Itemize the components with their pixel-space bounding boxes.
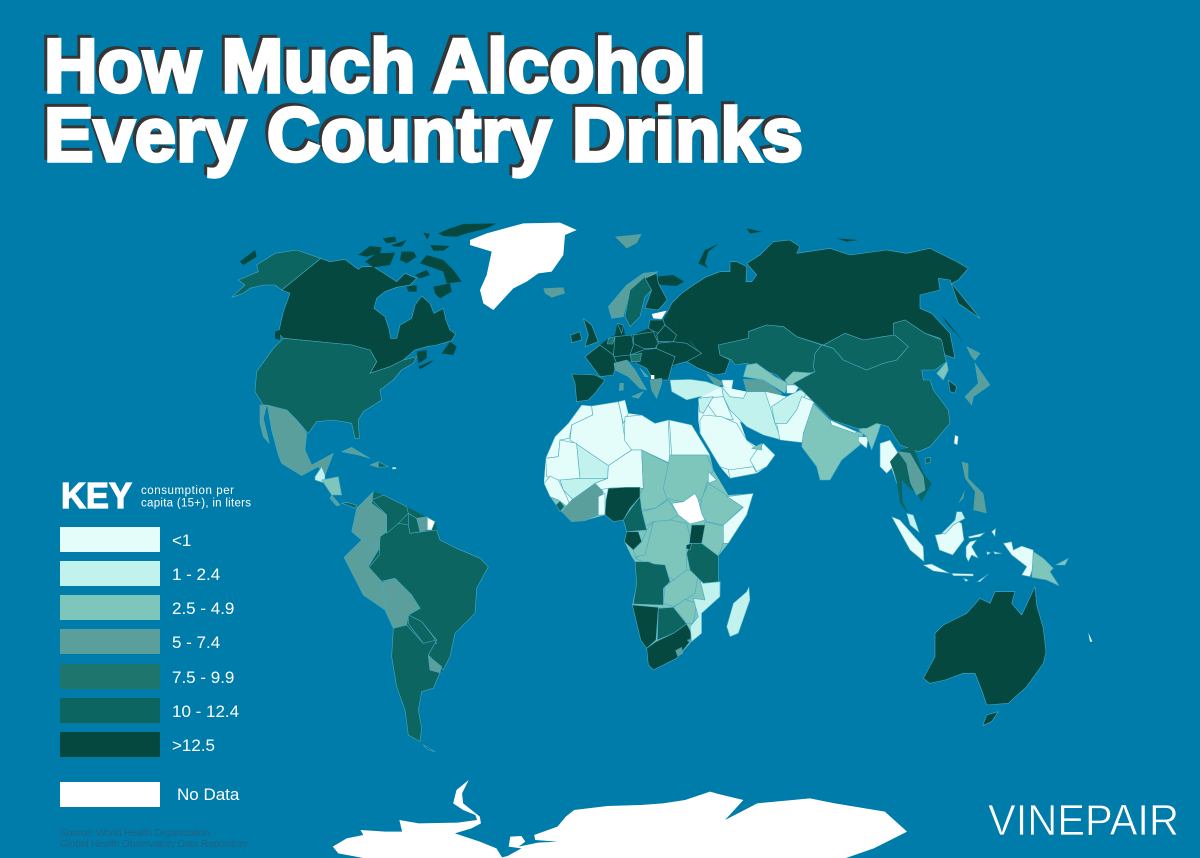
Central America and Caribbean bbox=[315, 447, 396, 508]
key swatch: 7.5 to 9.9: 7.5 - 9.9 bbox=[172, 668, 234, 687]
Uruguay bbox=[428, 656, 442, 673]
Central Asia bbox=[722, 363, 815, 402]
Myanmar bbox=[880, 440, 898, 483]
Philippines bbox=[958, 462, 987, 513]
Kazakhstan bbox=[718, 325, 822, 385]
map: Africa bbox=[544, 400, 753, 670]
source note: Global Health Observatory Data Repository bbox=[60, 838, 249, 850]
10-12.4 African countries bbox=[623, 497, 718, 640]
Canadian Arctic islands bbox=[240, 223, 497, 369]
Canada bbox=[278, 258, 456, 373]
key swatch: no data bbox=[60, 782, 240, 807]
title: Every Country Drinks bbox=[44, 93, 803, 178]
China and Mongolia bbox=[793, 320, 950, 452]
Estonia bbox=[652, 311, 667, 319]
Colombia, Ecuador, Peru, Bolivia bbox=[344, 492, 427, 628]
Dark African countries bbox=[605, 487, 705, 670]
Svalbard bbox=[615, 234, 642, 248]
Brazil bbox=[368, 523, 488, 670]
map: North America and Greenland bbox=[232, 223, 577, 508]
key swatch: 1 to 2.4: 1 - 2.4 bbox=[172, 565, 220, 584]
key swatch: 1 to 2.4 bbox=[60, 561, 220, 586]
key swatch: 2.5 to 4.9: 2.5 - 4.9 bbox=[172, 599, 234, 618]
key swatch: 5 to 7.4: 5 - 7.4 bbox=[172, 633, 220, 652]
title bbox=[41, 21, 803, 178]
Madagascar bbox=[727, 587, 750, 637]
Korea, Japan, Taiwan bbox=[937, 347, 990, 445]
Paraguay bbox=[408, 615, 437, 643]
key subtitle: consumption per bbox=[141, 485, 234, 497]
Russian islands bbox=[657, 228, 963, 342]
Australia bbox=[923, 587, 1046, 726]
title: How Much Alcohol bbox=[41, 21, 703, 106]
Scandinavia bbox=[608, 272, 667, 327]
key swatch: 2.5 to 4.9 bbox=[60, 595, 234, 620]
Eritrea and Somalia bbox=[708, 472, 753, 543]
key swatch: 7.5 to 9.9 bbox=[60, 664, 234, 689]
Iceland bbox=[543, 287, 565, 298]
title: How Much Alcohol bbox=[44, 24, 706, 109]
Mali and Burkina bbox=[560, 444, 608, 500]
Argentina and Chile bbox=[392, 625, 440, 752]
logo: VINEPAIR bbox=[988, 796, 1179, 845]
key swatch: under 1 bbox=[60, 527, 191, 552]
Venezuela and Guyana bbox=[372, 495, 422, 533]
title: Every Country Drinks bbox=[41, 90, 800, 175]
source note: Source: World Health Organization, bbox=[60, 827, 212, 839]
Middle East and South Asia bbox=[698, 387, 882, 480]
New Zealand bbox=[1088, 633, 1092, 642]
key swatch: over 12.5: >12.5 bbox=[172, 736, 215, 755]
Russia bbox=[665, 240, 980, 375]
Central and East Africa 2.5-4.9 bbox=[633, 450, 743, 623]
key bbox=[60, 475, 251, 807]
Low Countries and Austria bbox=[607, 337, 642, 362]
South Sudan bbox=[672, 493, 705, 524]
North Africa bbox=[546, 400, 710, 480]
Niger and West Africa bbox=[544, 450, 643, 510]
key swatch: over 12.5 bbox=[60, 732, 215, 757]
South America silhouette bbox=[344, 492, 488, 742]
Lesotho and Swaziland bbox=[676, 639, 691, 656]
Indonesia and Malaysia bbox=[892, 512, 1002, 582]
New Guinea bbox=[1003, 542, 1068, 586]
Africa silhouette bbox=[544, 400, 753, 670]
key swatch: 10 to 12.4 bbox=[60, 698, 239, 723]
map: Southeast Asia and Oceania bbox=[880, 440, 1092, 726]
Liberia bbox=[556, 501, 564, 512]
Turkey bbox=[670, 379, 722, 400]
key swatch: 5 to 7.4 bbox=[60, 629, 220, 654]
map: South America bbox=[344, 492, 488, 752]
Mexico bbox=[260, 405, 333, 476]
French Guiana bbox=[427, 517, 435, 530]
Albania bbox=[651, 375, 654, 379]
Europe bbox=[571, 313, 702, 402]
key subtitle: capita (15+), in liters bbox=[141, 498, 251, 510]
key swatch: under 1: <1 bbox=[172, 531, 191, 550]
map: Eurasia bbox=[571, 228, 990, 480]
Ivory Coast region bbox=[562, 483, 603, 522]
Togo and Benin bbox=[598, 493, 605, 515]
key heading: KEY bbox=[61, 475, 132, 516]
Mozambique and Malawi bbox=[690, 580, 720, 642]
Greenland bbox=[470, 223, 577, 310]
map: Antarctica bbox=[333, 780, 907, 858]
key swatch: 10 to 12.4: 10 - 12.4 bbox=[172, 702, 239, 721]
Indochina bbox=[890, 447, 932, 513]
key swatch: no data: No Data bbox=[177, 785, 240, 804]
Italy and Balkans bbox=[614, 360, 725, 398]
United States bbox=[232, 250, 417, 438]
